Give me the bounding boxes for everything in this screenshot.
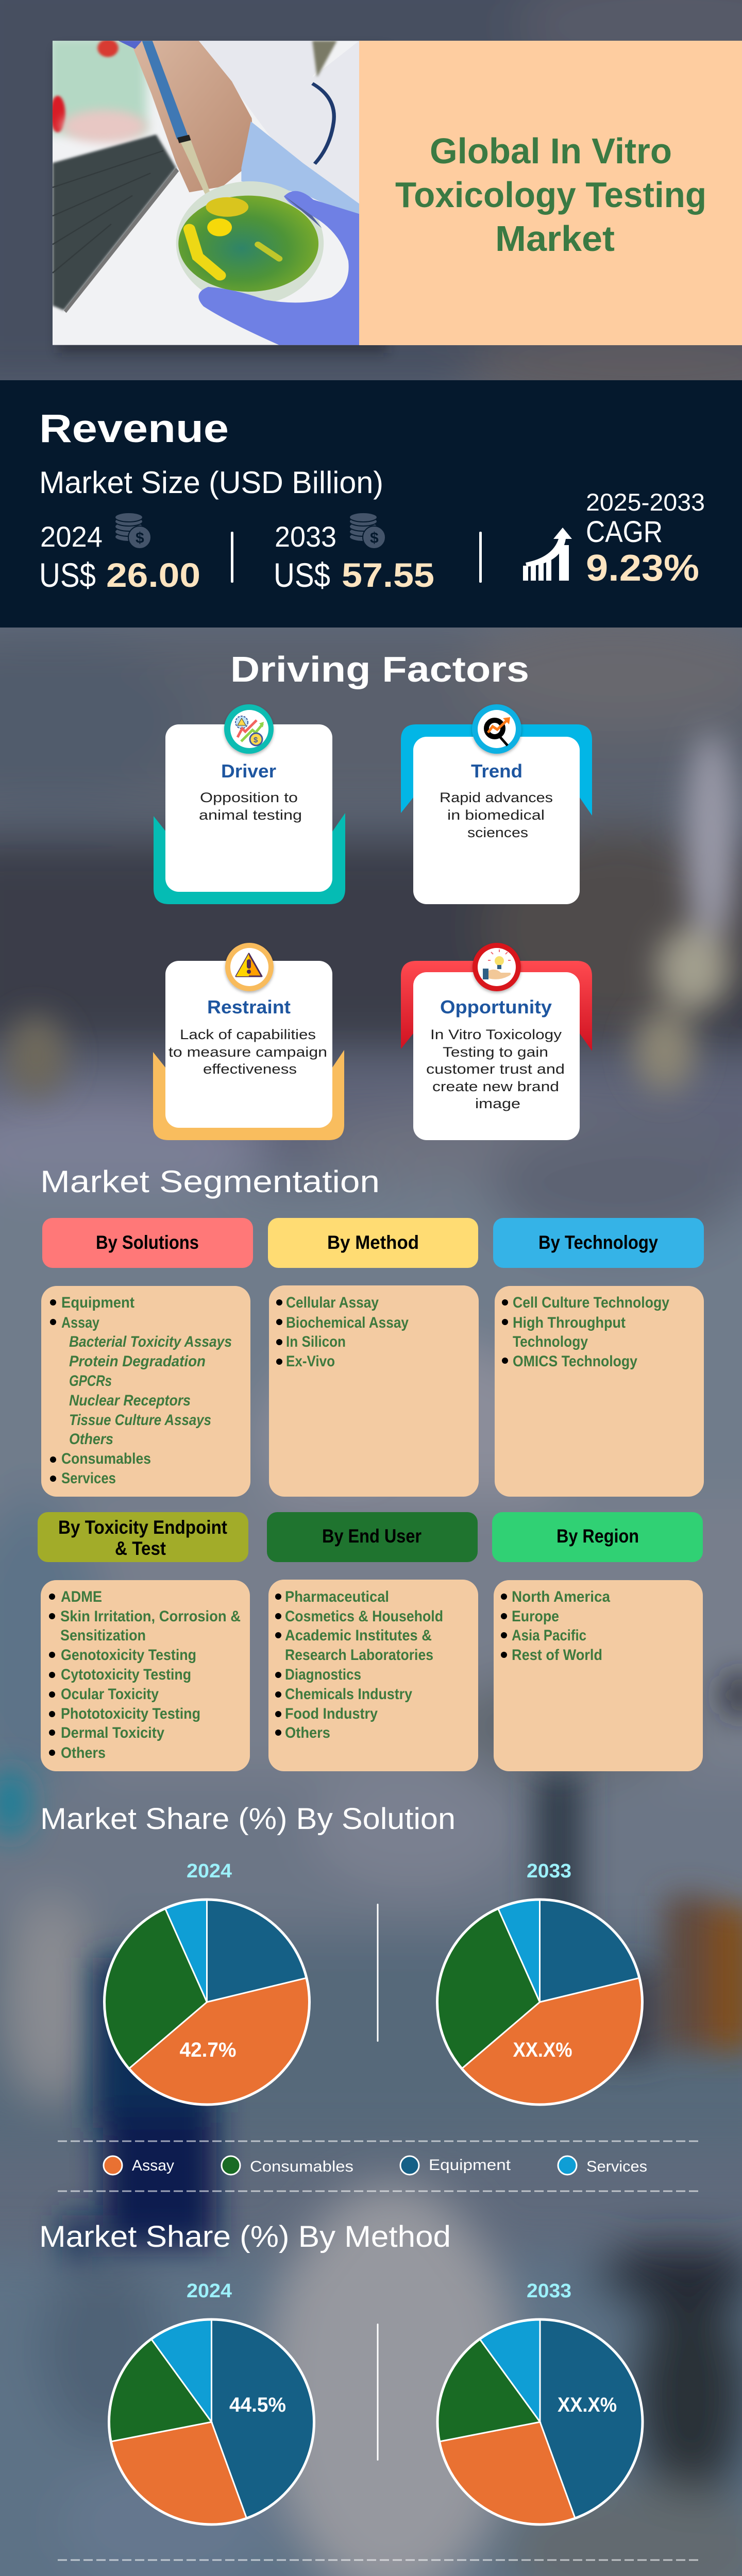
title panel: Global In Vitro (430, 131, 672, 171)
restraint text (168, 996, 327, 1077)
heading: driving factors: Driving Factors (230, 649, 529, 689)
card: opportunity (401, 943, 592, 1140)
segment: by end user: Others (285, 1724, 330, 1741)
title panel (359, 41, 742, 345)
pie chart: method 2024 (109, 2319, 314, 2524)
CAGR: 9.23% (586, 548, 699, 589)
segment: by solutions: Consumables (61, 1450, 151, 1467)
segment: by end user: Academic Institutes & (285, 1627, 432, 1644)
segment: by toxicity endpoint and test: ADME (61, 1588, 102, 1605)
segment: by solutions: Assay (61, 1314, 99, 1331)
hero photo: scientist pipetting into a petri dish (47, 37, 387, 353)
segment: by toxicity endpoint and test: Cytotoxicity Testing (61, 1666, 191, 1683)
trend text: in biomedical (447, 807, 545, 823)
restraint text: Lack of capabilities (180, 1027, 316, 1042)
segment: by solutions: Others (69, 1431, 113, 1448)
segment: by region: North America (512, 1588, 610, 1605)
icon: driver arrows and gears: $ (254, 736, 258, 744)
icon: driver arrows and gears (235, 716, 264, 745)
segment: by method: Biochemical Assay (286, 1314, 409, 1331)
title panel: Toxicology Testing (395, 175, 706, 215)
pie chart: solution 2033: XX.X% (513, 2039, 572, 2061)
segment: by end user (267, 1512, 478, 1771)
segment: by method: By Method (327, 1232, 419, 1253)
segment: by end user: Research Laboratories (285, 1647, 433, 1664)
segment: by solutions: Bacterial Toxicity Assays (69, 1333, 232, 1350)
card: driver (154, 704, 345, 904)
legend: solution: Consumables (250, 2158, 353, 2175)
pie chart: method 2033: XX.X% (558, 2394, 617, 2416)
CAGR: 2025-2033 (586, 488, 705, 516)
icon: coins 2024: $ (136, 530, 144, 547)
heading: market share by method: Market Share (%) By Method (39, 2220, 451, 2253)
market size label: Market Size (USD Billion) (39, 465, 383, 500)
segment: by toxicity endpoint and test: Skin Irritation, Corrosion & (60, 1608, 241, 1625)
opportunity text: Testing to gain (443, 1044, 548, 1060)
opportunity text: create new brand (432, 1079, 559, 1094)
driver text: Driver (221, 760, 276, 782)
segment: by end user: Diagnostics (285, 1666, 361, 1683)
pie chart: method 2033 (437, 2319, 643, 2524)
icon: growth chart (523, 528, 572, 581)
segment: by method (268, 1218, 479, 1497)
segment: by technology: By Technology (538, 1232, 658, 1253)
segment: by end user: Pharmaceutical (285, 1588, 389, 1605)
segment: by end user: Cosmetics & Household (285, 1608, 443, 1625)
trend text (440, 760, 553, 840)
segment: by technology: Cell Culture Technology (513, 1294, 669, 1311)
segment: by technology: OMICS Technology (513, 1353, 637, 1370)
icon: lightbulb over hand (483, 950, 511, 979)
segment: by technology: Technology (513, 1333, 588, 1350)
CAGR (586, 488, 705, 589)
opportunity text: In Vitro Toxicology (430, 1027, 562, 1042)
driver text: Opposition to (200, 790, 298, 805)
pie labels 2024 and 2033: method: 2033 (527, 2280, 571, 2302)
trend text: sciences (467, 825, 528, 840)
restraint text: to measure campaign (168, 1044, 327, 1060)
pie labels 2024 and 2033: solution: 2024 (187, 1860, 232, 1882)
segment: by solutions (41, 1218, 253, 1497)
segment: by solutions: Nuclear Receptors (69, 1392, 191, 1409)
segment: by toxicity endpoint and test: Ocular Toxicity (61, 1686, 159, 1703)
segment: by toxicity endpoint and test: Others (61, 1744, 106, 1761)
segment: by region: Asia Pacific (512, 1627, 586, 1644)
segment: by solutions: By Solutions (96, 1232, 199, 1253)
segment: by method: Ex-Vivo (286, 1353, 335, 1370)
divider between solution pies (377, 1904, 378, 2042)
segment: by toxicity endpoint and test: Dermal Toxicity (61, 1724, 164, 1741)
legend: solution: Assay (132, 2157, 174, 2174)
segment: by toxicity endpoint and test: & Test (115, 1538, 166, 1559)
segment: by toxicity endpoint and test: Sensitization (60, 1627, 146, 1644)
segment: by solutions: Equipment (61, 1294, 134, 1311)
2033 value: 2033 (275, 520, 336, 553)
opportunity text: Opportunity (440, 996, 552, 1018)
segment: by technology (493, 1218, 704, 1497)
segment: by region: Europe (512, 1608, 559, 1625)
pie labels 2024 and 2033: solution: 2033 (527, 1860, 571, 1882)
title panel: Market (495, 218, 615, 259)
revenue panel (0, 380, 742, 628)
segment: by method: Cellular Assay (286, 1294, 379, 1311)
segment: by toxicity endpoint and test: Genotoxicity Testing (61, 1647, 196, 1664)
icon: coins 2033 (349, 513, 385, 549)
restraint text: Restraint (207, 996, 291, 1018)
segment: by method: In Silicon (286, 1333, 346, 1350)
CAGR: CAGR (586, 515, 663, 549)
segment: by toxicity endpoint and test: By Toxicity Endpoint (58, 1517, 227, 1538)
2024 value: 26.00 (106, 556, 200, 594)
icon: coins 2024 (115, 513, 151, 549)
card: restraint (153, 943, 344, 1140)
segment: by solutions: Services (61, 1470, 116, 1487)
pie chart: solution 2033 (437, 1900, 642, 2105)
opportunity text (426, 996, 565, 1111)
legend: solution: Equipment (429, 2157, 511, 2174)
2024 value: US$ (39, 556, 96, 594)
legend: solution: Services (586, 2158, 647, 2175)
trend text: Rapid advances (440, 790, 553, 805)
segment: by region: Rest of World (512, 1647, 602, 1664)
restraint text: effectiveness (203, 1061, 297, 1077)
heading: market segmentation: Market Segmentation (40, 1164, 380, 1199)
segment: by region: By Region (556, 1526, 639, 1547)
2024 value: 2024 (40, 520, 103, 553)
icon: warning triangle (236, 954, 262, 976)
opportunity text: customer trust and (426, 1061, 565, 1077)
segment: by technology: High Throughput (513, 1314, 626, 1331)
segment: by solutions: Tissue Culture Assays (69, 1412, 211, 1429)
segment: by region (492, 1512, 703, 1771)
segment: by end user: Food Industry (285, 1705, 378, 1722)
pie chart: solution 2024: 42.7% (179, 2039, 236, 2061)
trend text: Trend (471, 760, 522, 782)
divider (231, 532, 233, 583)
pie chart: method 2024: 44.5% (229, 2394, 286, 2416)
segment: by end user: By End User (322, 1526, 421, 1547)
driver text: animal testing (199, 807, 302, 823)
pie labels 2024 and 2033: method: 2024 (187, 2280, 232, 2302)
pie labels 2024 and 2033: solution (187, 1860, 571, 1882)
opportunity text: image (475, 1096, 520, 1111)
icon: coins 2033: $ (370, 530, 379, 547)
legend: solution (58, 2141, 700, 2191)
icon: magnifier trend (486, 717, 510, 745)
pie labels 2024 and 2033: method (187, 2280, 571, 2302)
divider between method pies (377, 2324, 378, 2461)
segment: by end user: Chemicals Industry (285, 1686, 412, 1703)
heading: market share by solution: Market Share (%) By Solution (40, 1802, 456, 1836)
revenue heading: Revenue (39, 406, 229, 451)
2024 value (39, 520, 200, 594)
segment: by toxicity endpoint and test: Phototoxicity Testing (61, 1705, 200, 1722)
card: trend (401, 704, 592, 904)
divider (479, 532, 482, 583)
2033 value: 57.55 (342, 556, 434, 594)
segment: by toxicity endpoint and test (38, 1512, 250, 1771)
legend: method (58, 2560, 700, 2576)
2033 value: US$ (274, 556, 330, 594)
pie chart: solution 2024 (104, 1900, 309, 2105)
segment: by solutions: Protein Degradation (69, 1353, 206, 1370)
segment: by solutions: GPCRs (69, 1372, 112, 1389)
2033 value (274, 520, 434, 594)
driver text (199, 760, 302, 823)
